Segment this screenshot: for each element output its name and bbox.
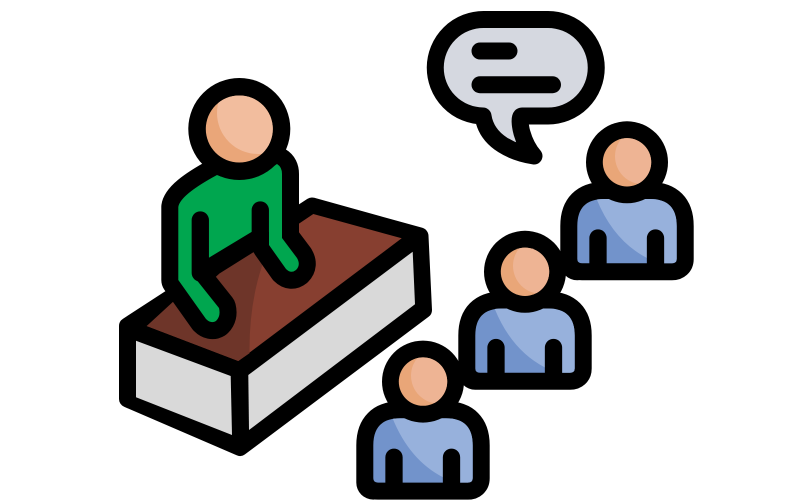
illustration: speaker at a desk addressing three listeners: [119, 11, 694, 500]
listener: back: [577, 121, 680, 268]
bubble shape: [435, 19, 596, 156]
listener: front: [373, 341, 476, 487]
speaker: [178, 72, 299, 322]
desk left face: [136, 341, 232, 435]
desk outline: [128, 206, 424, 448]
desk top: [147, 214, 402, 361]
desk: [128, 206, 424, 448]
speaker head: [188, 78, 290, 180]
speech bubble: [435, 19, 596, 156]
desk top shadow: [147, 220, 262, 361]
desk right face: [248, 252, 415, 430]
bubble long text line: [480, 76, 552, 93]
speaker torso and arms: [178, 164, 299, 322]
speaker right arm line: [252, 210, 269, 243]
listener: middle: [475, 231, 578, 378]
speaker left arm line: [200, 220, 260, 273]
bubble short text line: [480, 42, 509, 60]
